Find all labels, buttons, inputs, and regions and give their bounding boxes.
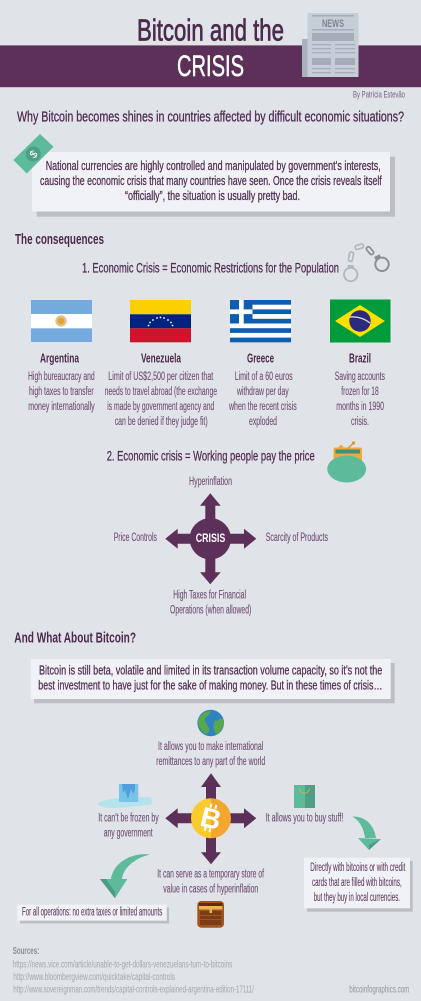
sources — [13, 946, 254, 995]
callout: no extra taxes: For all operations: no extra taxes or limited amounts — [22, 907, 162, 919]
text: store of value: value in cases of hyperinflation — [163, 884, 258, 896]
heading: the consequences: The consequences — [15, 231, 104, 248]
diagram: bitcoin arrows — [165, 773, 256, 864]
label: Scarcity of Products: Scarcity of Products — [266, 532, 328, 544]
text: cannot be frozen: It can't be frozen by — [98, 813, 159, 825]
icon: globe — [197, 710, 224, 736]
icon: newspaper — [302, 13, 358, 77]
label: Price Controls: Price Controls — [114, 532, 157, 544]
title: Bitcoin and the: Bitcoin and the — [137, 12, 284, 48]
icon: shopping bag — [294, 785, 315, 808]
icon: purse — [327, 441, 366, 482]
flag: Greece — [230, 300, 291, 342]
country: Greece: when the recent crisis — [228, 401, 297, 413]
diagram: crisis arrows — [165, 493, 256, 584]
icon: newspaper: NEWS — [322, 18, 344, 30]
title band — [0, 45, 421, 88]
country: Greece: exploded — [249, 416, 277, 428]
country: Argentina: Argentina — [40, 351, 79, 366]
country: Brazil: Brazil — [349, 351, 371, 366]
flag: Argentina — [31, 300, 92, 342]
icon: ice block — [98, 784, 152, 808]
title: CRISIS: CRISIS — [177, 50, 244, 83]
country: Greece: Greece — [247, 351, 274, 366]
arrow: buy stuff to note — [352, 816, 381, 850]
country: Argentina: money internationally — [28, 401, 95, 413]
text: cannot be frozen: any government — [104, 828, 153, 840]
label: High Taxes: Operations (when allowed) — [170, 604, 251, 616]
text: store of value: It can serve as a temporary store of — [157, 869, 264, 881]
diagram: crisis arrows: CRISIS — [196, 531, 225, 545]
text: remittances: remittances to any part of the world — [156, 756, 265, 768]
country: Argentina — [28, 351, 95, 413]
flag: Brazil — [330, 300, 390, 342]
panel: national currencies: “officially”, the situation is usually pretty bad. — [125, 189, 300, 203]
text: cannot be frozen — [98, 813, 159, 840]
callout: no extra taxes — [17, 905, 169, 924]
text: buy stuff: It allows you to buy stuff! — [266, 813, 343, 825]
country: Greece: Limit of a 60 euros — [235, 371, 293, 383]
country: Greece — [228, 351, 297, 428]
country: Brazil — [335, 351, 385, 428]
icon: banknote — [13, 134, 54, 174]
text: remittances: It allows you to make international — [158, 741, 263, 753]
flag: Venezuela — [130, 300, 191, 342]
country: Argentina: High bureaucracy and — [28, 371, 95, 383]
icon: treasure chest — [197, 901, 224, 928]
panel: bitcoin is still beta — [31, 659, 395, 703]
country: Venezuela: Limit of US$2,500 per citizen that — [108, 371, 214, 383]
country: Brazil: frozen for 18 — [341, 386, 379, 398]
icon: handcuffs — [344, 243, 389, 281]
heading: and what about bitcoin: And What About Bitcoin? — [14, 629, 136, 646]
callout: bitcoins or credit cards — [304, 858, 413, 912]
sources: https://news.vice.com/article/unable-to-get-dollars-venezuelans-turn-to-bitcoins — [13, 959, 232, 970]
country: Brazil: crisis. — [351, 416, 369, 428]
country: Greece: withdraw per day — [236, 386, 289, 398]
sources: http://www.sovereignman.com/trends/capital-controls-explained-argentina-edition-17111/ — [13, 984, 254, 995]
country: Venezuela: is made by government agency and — [107, 401, 214, 413]
country: Argentina: high taxes to transfer — [29, 386, 94, 398]
text: store of value — [157, 869, 264, 896]
country: Venezuela: Venezuela — [141, 351, 181, 366]
label: High Taxes — [170, 589, 251, 616]
country: Venezuela — [105, 351, 217, 428]
arrow: frozen to note — [100, 854, 150, 898]
country: Venezuela: can be denied if they judge fit) — [115, 416, 208, 428]
label: Hyperinflation: Hyperinflation — [189, 476, 232, 488]
country: Brazil: months in 1990 — [336, 401, 384, 413]
panel: national currencies — [32, 152, 395, 217]
heading: working people pay: 2. Economic crisis = Working people pay the price — [107, 448, 315, 464]
country: Venezuela: needs to travel abroad (the exchange — [105, 386, 217, 398]
icon: banknote: $ — [28, 148, 40, 161]
country: Brazil: Saving accounts — [335, 371, 385, 383]
text: remittances — [156, 741, 265, 768]
label: High Taxes: High Taxes for Financial — [173, 589, 246, 601]
sources: Sources: — [13, 946, 39, 957]
sources: http://www.bloombergview.com/quicktake/capital-controls — [13, 972, 175, 983]
diagram: bitcoin arrows: B — [197, 801, 224, 836]
